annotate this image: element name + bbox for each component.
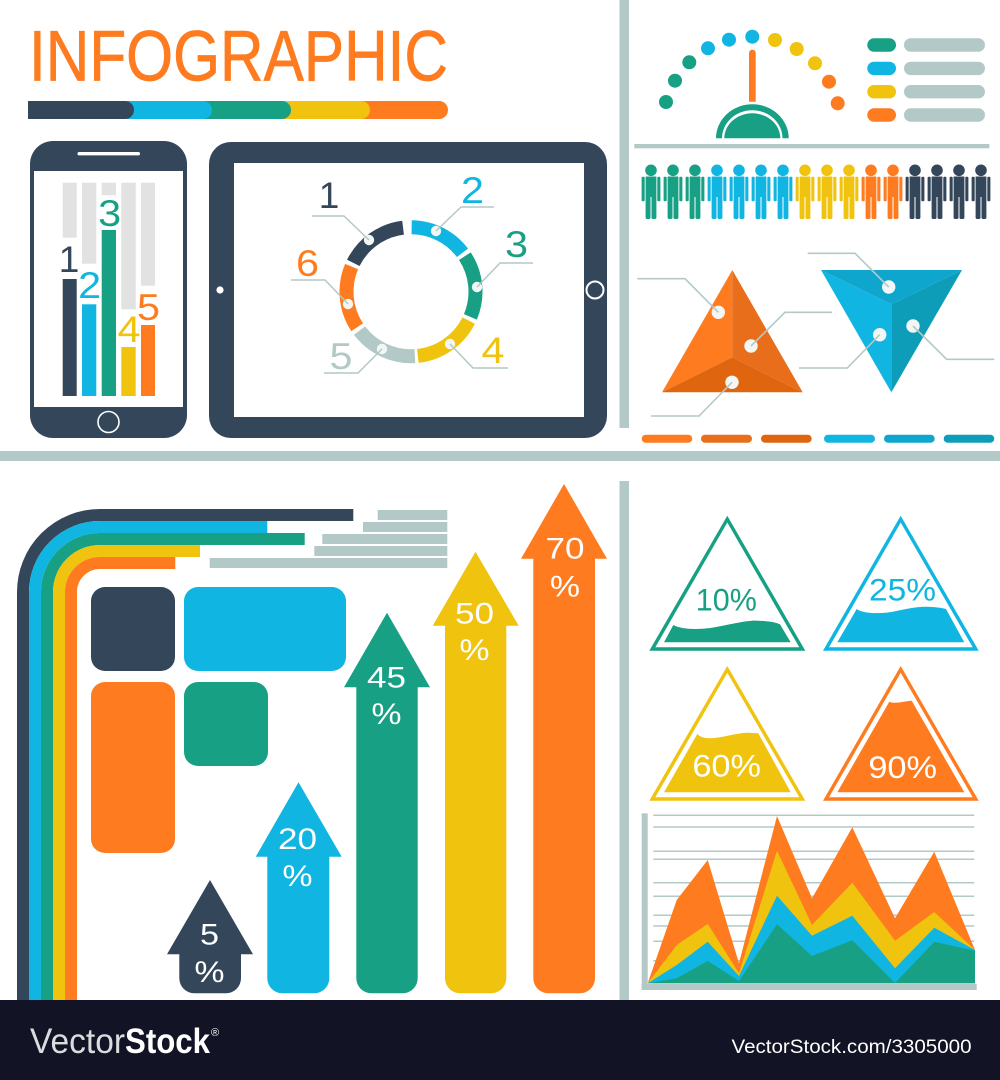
arrow: 45%: % (372, 698, 402, 731)
gauge base (716, 104, 789, 138)
bar chart tracks (63, 183, 155, 309)
arrow: 5%: % (194, 956, 224, 989)
ring chart (322, 202, 500, 381)
arrow: 45% (344, 613, 430, 993)
ring chart numbers (296, 170, 528, 377)
footer bar (0, 1000, 1000, 1080)
ring chart numbers: 1 (319, 175, 339, 216)
chart axes (642, 813, 977, 990)
triangle gauge: 25%: 25% (869, 572, 936, 608)
orange series (648, 816, 975, 983)
gauge (659, 30, 845, 138)
title colour bar (28, 101, 448, 119)
arrow: 50%: % (460, 634, 490, 667)
tablet body (209, 142, 607, 438)
triangle gauge: 10%: 10% (696, 582, 757, 618)
arrow: 5%: 5 (200, 918, 219, 951)
tablet button (586, 282, 604, 298)
triangle gauge: 25% (823, 516, 979, 651)
triangle gauge: 10% (649, 516, 805, 651)
gauge divider (634, 144, 989, 148)
triangle gauge: 60%: 60% (692, 748, 761, 784)
triangle gauge: 90%: 90% (868, 749, 937, 785)
bar chart numbers: 5 (137, 287, 160, 328)
arrow: 70%: 70 (546, 533, 584, 566)
green series (648, 924, 975, 983)
bar chart values (63, 230, 155, 396)
gauge needle (749, 50, 756, 102)
people row (642, 164, 990, 219)
arrow: 70%: % (550, 570, 580, 604)
triangle gauge: 60% (649, 666, 805, 801)
phone body (30, 141, 187, 438)
bar chart numbers: 3 (98, 193, 121, 234)
pyramid legend pills (642, 435, 994, 443)
ring chart numbers: 2 (461, 170, 484, 211)
footer logo (30, 1022, 219, 1061)
blue pyramid (799, 253, 994, 392)
ring chart leaders (291, 207, 533, 373)
tablet with ring chart (209, 142, 607, 438)
phone home button (98, 412, 119, 432)
grey text placeholder bars (210, 510, 447, 568)
bar chart numbers: 2 (78, 265, 101, 306)
arrow: 70% (521, 484, 607, 993)
gauge legend (867, 38, 985, 122)
arrow: 50%: 50 (455, 597, 494, 630)
tablet camera (216, 286, 224, 294)
area chart (642, 813, 977, 990)
footer logo: ® (211, 1027, 219, 1039)
phone screen (34, 171, 183, 407)
ring chart numbers: 6 (296, 243, 319, 284)
bar chart numbers (59, 193, 160, 350)
chart grid lines (653, 815, 974, 961)
footer url: VectorStock.com/3305000 (732, 1036, 972, 1058)
footer logo: Vector (30, 1022, 125, 1061)
arrow: 20% (256, 782, 342, 993)
ring chart numbers: 4 (482, 330, 504, 371)
arrow: 5% (167, 880, 253, 993)
footer logo: Stock (125, 1022, 210, 1061)
tablet screen (234, 163, 584, 417)
blue series (648, 896, 975, 983)
gauge dots (659, 30, 845, 110)
curved rainbow lines (23, 515, 353, 1000)
triangle gauge: 90% (823, 666, 979, 801)
arrow: 20%: % (282, 860, 312, 893)
ring chart numbers: 3 (505, 224, 528, 265)
title: INFOGRAPHIC (29, 18, 448, 96)
phone speaker (78, 152, 140, 155)
phone with bar chart (30, 141, 187, 438)
arrow: 20%: 20 (278, 823, 317, 856)
yellow series (648, 851, 975, 983)
orange pyramid (637, 270, 832, 416)
arrow: 50% (433, 552, 519, 993)
bar chart numbers: 1 (59, 239, 79, 280)
arrow: 45%: 45 (367, 661, 406, 694)
ring chart numbers: 5 (330, 336, 352, 377)
rounded colour blocks (91, 587, 346, 853)
bar chart numbers: 4 (118, 309, 141, 350)
